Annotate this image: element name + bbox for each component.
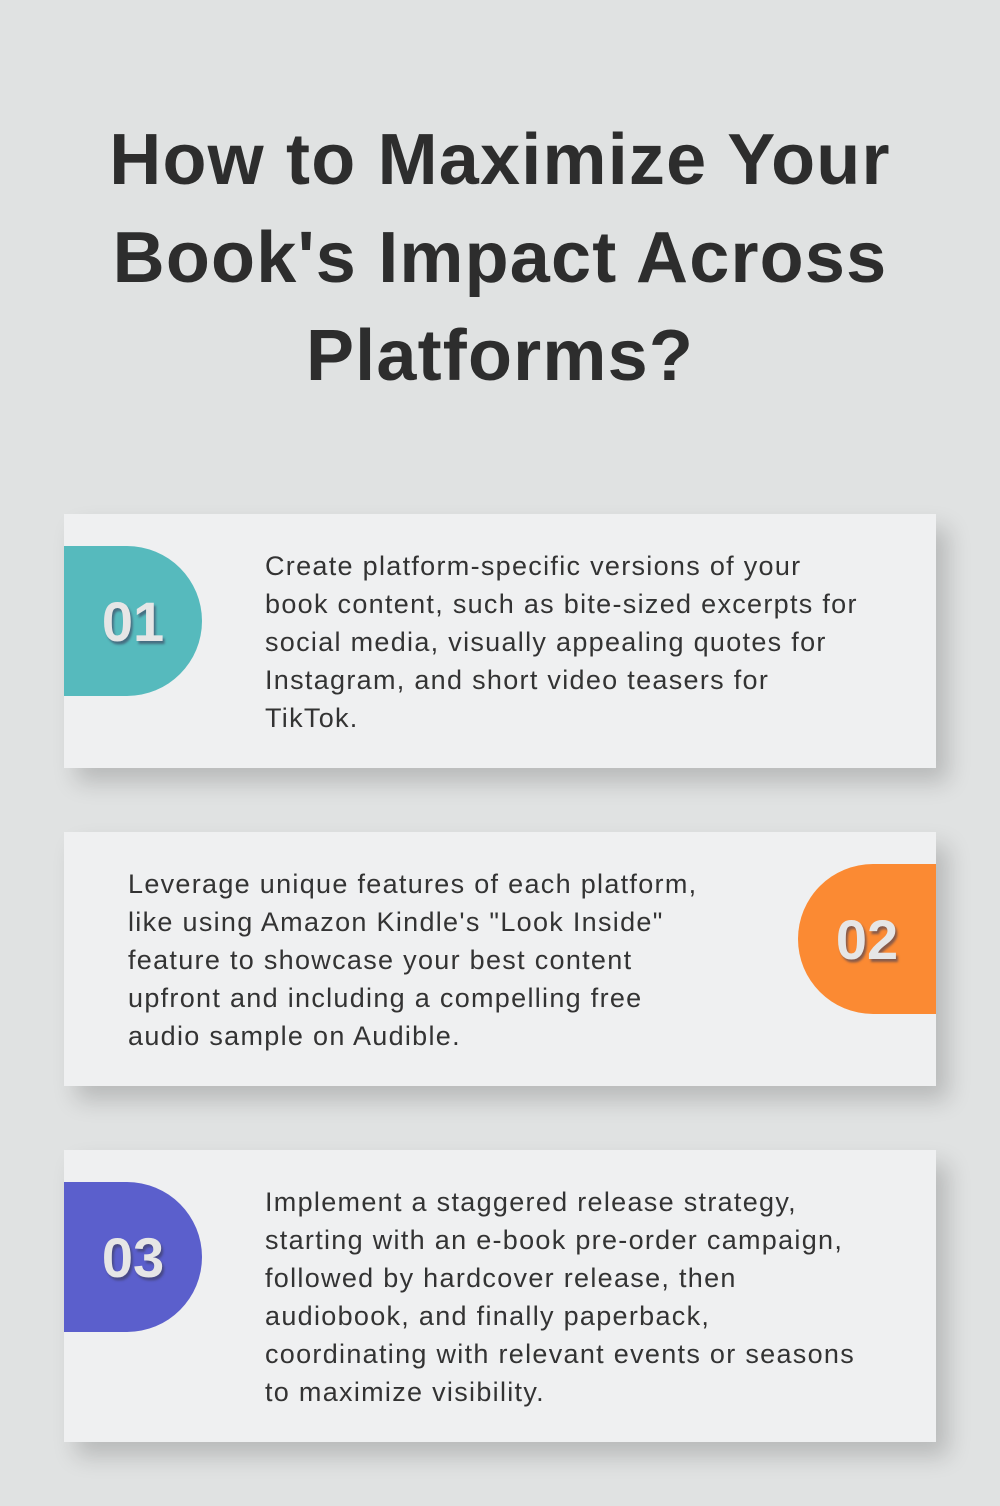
title: Platforms? [306, 316, 694, 396]
text step 1: social media, visually appealing quotes for [265, 627, 827, 657]
badge 03 [64, 1182, 202, 1332]
panel: step 1 [64, 514, 936, 768]
text step 2: Leverage unique features of each platform, [128, 869, 697, 899]
text step 2: upfront and including a compelling free [128, 983, 642, 1013]
text step 3: followed by hardcover release, then [265, 1263, 737, 1293]
text step 1: Create platform-specific versions of your [265, 551, 801, 581]
text step 3: coordinating with relevant events or seasons [265, 1339, 855, 1369]
text step 3: audiobook, and finally paperback, [265, 1301, 710, 1331]
text step 1: book content, such as bite-sized excerpts for [265, 589, 858, 619]
text step 1 [265, 551, 858, 733]
text step 1: TikTok. [265, 703, 359, 733]
text step 3: to maximize visibility. [265, 1377, 545, 1407]
badge 02: 02 [836, 908, 898, 970]
text step 2: audio sample on Audible. [128, 1021, 461, 1051]
text step 3: Implement a staggered release strategy, [265, 1187, 797, 1217]
text step 2: like using Amazon Kindle's "Look Inside" [128, 907, 664, 937]
panel: step 2 [64, 832, 936, 1086]
title: How to Maximize Your [109, 120, 891, 200]
badge 01: 01 [102, 590, 164, 652]
badge 01 [64, 546, 202, 696]
text step 2: feature to showcase your best content [128, 945, 632, 975]
text step 3 [265, 1187, 855, 1407]
text step 3: starting with an e-book pre-order campaign, [265, 1225, 843, 1255]
title [109, 120, 891, 396]
text step 2 [128, 869, 697, 1051]
title: Book's Impact Across [113, 218, 887, 298]
badge 03: 03 [102, 1226, 164, 1288]
text step 1: Instagram, and short video teasers for [265, 665, 769, 695]
panel: step 3 [64, 1150, 936, 1442]
badge 02 [798, 864, 936, 1014]
